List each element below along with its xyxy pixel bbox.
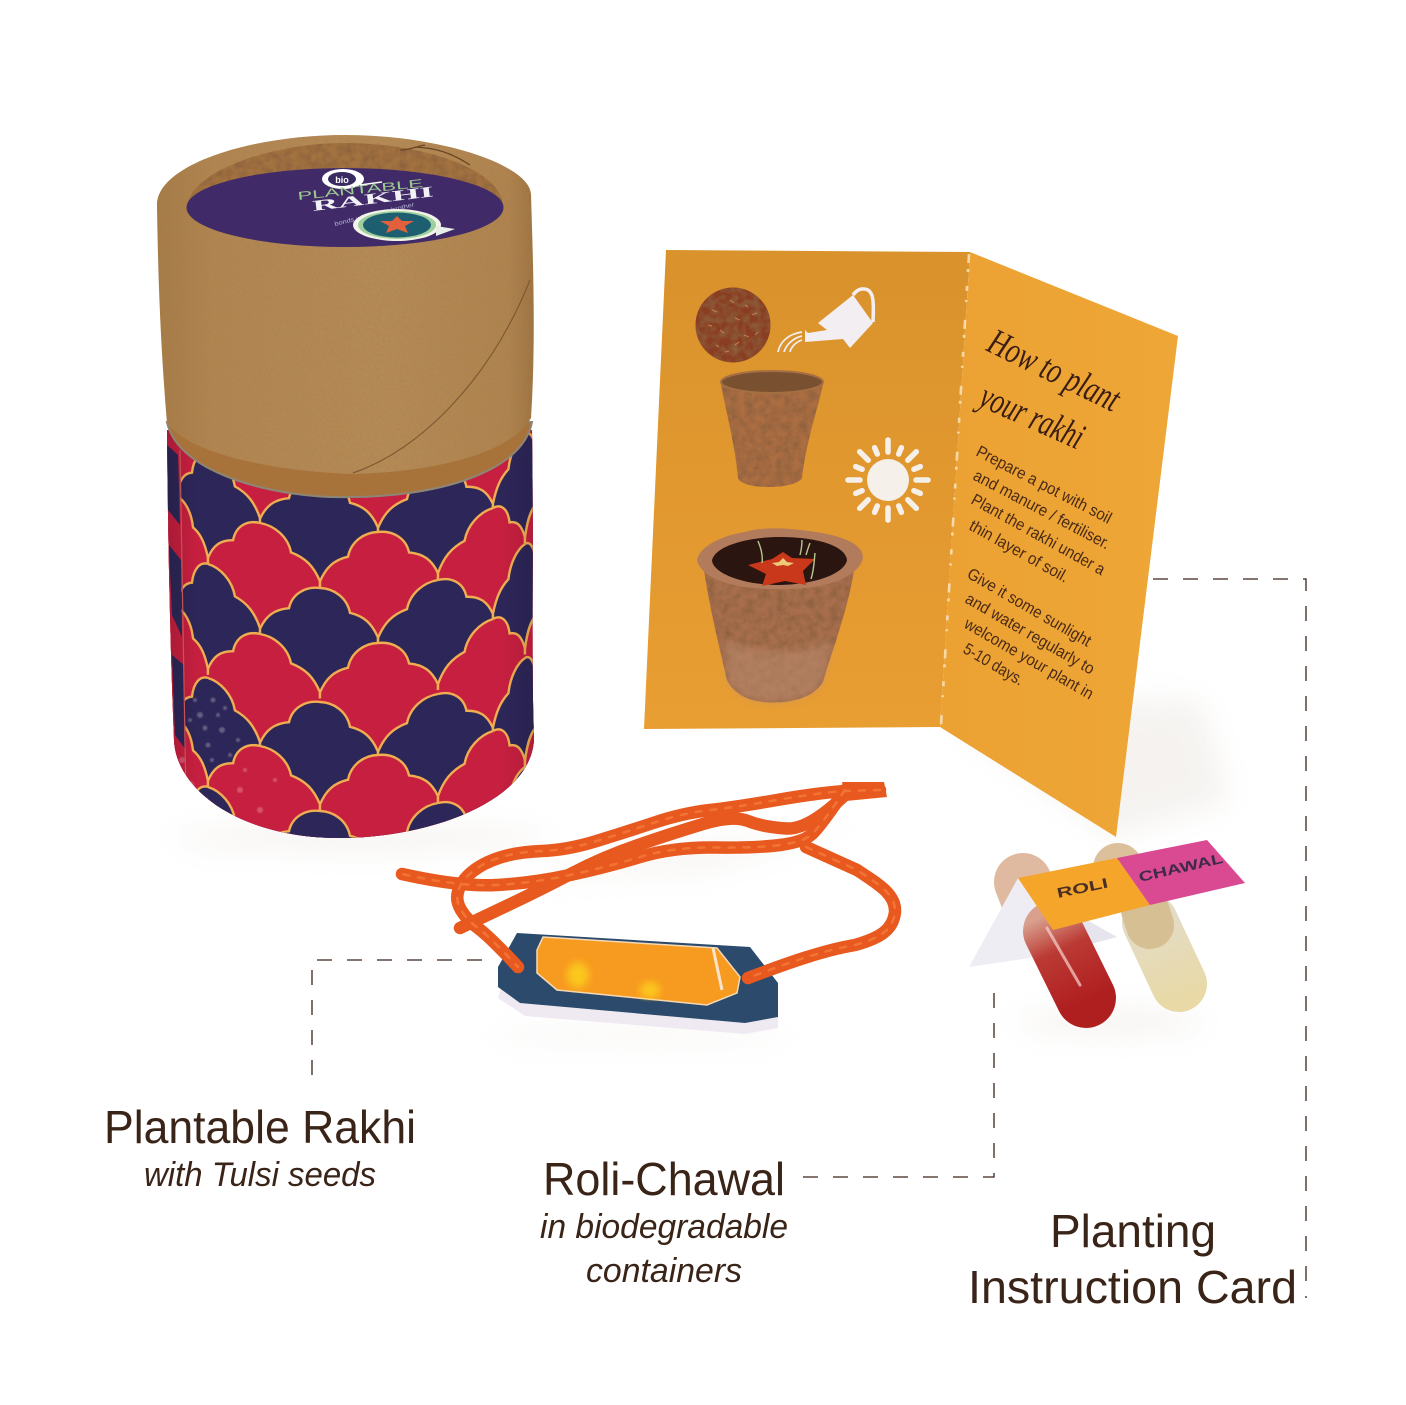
icon: soil disc — [696, 288, 770, 362]
kraft lid — [157, 135, 534, 474]
fold scuff — [941, 254, 969, 725]
label: roli-chawal — [540, 1153, 788, 1290]
lid rim crease — [400, 145, 470, 165]
card heading: your rakhi — [971, 375, 1091, 458]
label: roli-chawal: Roli-Chawal — [543, 1153, 785, 1205]
lid label disc: PLANTABLE — [297, 178, 424, 203]
label: plantable rakhi — [104, 1101, 416, 1194]
lid label disc: RAKHI — [312, 184, 435, 215]
connector: planting card — [1153, 579, 1306, 1298]
product tube: kraft lid and patterned body — [157, 135, 534, 838]
label: chawal — [1117, 840, 1245, 905]
card body text: welcome your plant in — [960, 614, 1097, 703]
plantable rakhi — [402, 782, 895, 1034]
card body text — [960, 443, 1115, 703]
cream chawal vial — [1118, 868, 1179, 984]
card left panel — [644, 250, 970, 729]
card body text: Plant the rakhi under a — [968, 491, 1109, 579]
spiral seam — [353, 280, 530, 473]
brand logo — [322, 169, 382, 189]
card body text: thin layer of soil. — [966, 517, 1072, 586]
roli and chawal vials — [969, 840, 1245, 998]
lid label disc: bonds with green brother — [334, 202, 415, 228]
white label stand — [969, 878, 1117, 967]
inner tube band — [167, 422, 532, 497]
card body text: and manure / fertiliser. — [970, 467, 1113, 553]
card right panel — [940, 252, 1178, 837]
rakhi badge — [494, 933, 778, 1034]
card heading — [971, 321, 1128, 458]
label: plantable rakhi: Plantable Rakhi — [104, 1101, 416, 1153]
label: planting instruction card — [968, 1205, 1297, 1313]
card body text: Prepare a pot with soil — [973, 443, 1115, 528]
label: roli-chawal: in biodegradable — [540, 1208, 788, 1246]
label: roli — [1018, 858, 1150, 930]
icon: sun — [848, 440, 928, 520]
lid label disc — [186, 168, 504, 247]
label: planting instruction card: Instruction Card — [968, 1261, 1297, 1313]
red vial cork — [1023, 882, 1030, 900]
connector: rakhi — [312, 960, 482, 1090]
lid inner wall — [187, 143, 503, 207]
orange thread — [402, 782, 895, 978]
card body text: 5-10 days. — [960, 640, 1027, 689]
label: plantable rakhi: with Tulsi seeds — [144, 1156, 376, 1194]
red roli vial — [1047, 928, 1086, 998]
small coir pot — [721, 371, 823, 487]
card heading: How to plant — [980, 321, 1128, 421]
label: roli-chawal: containers — [586, 1252, 742, 1290]
label: chawal: CHAWAL — [1137, 850, 1225, 885]
label: roli: ROLI — [1055, 874, 1109, 901]
brand logo: bio — [335, 175, 349, 185]
label: planting instruction card: Planting — [1050, 1205, 1216, 1257]
patterned tube body — [167, 430, 534, 838]
connector: roli-chawal — [803, 978, 994, 1177]
icon: watering can — [778, 289, 873, 352]
instruction card — [644, 250, 1178, 837]
card body text: Give it some sunlight — [964, 565, 1095, 651]
soft background shadows — [170, 700, 1230, 1041]
large coir pot with seedlings — [697, 528, 863, 702]
card body text: and water regularly to — [962, 590, 1098, 678]
